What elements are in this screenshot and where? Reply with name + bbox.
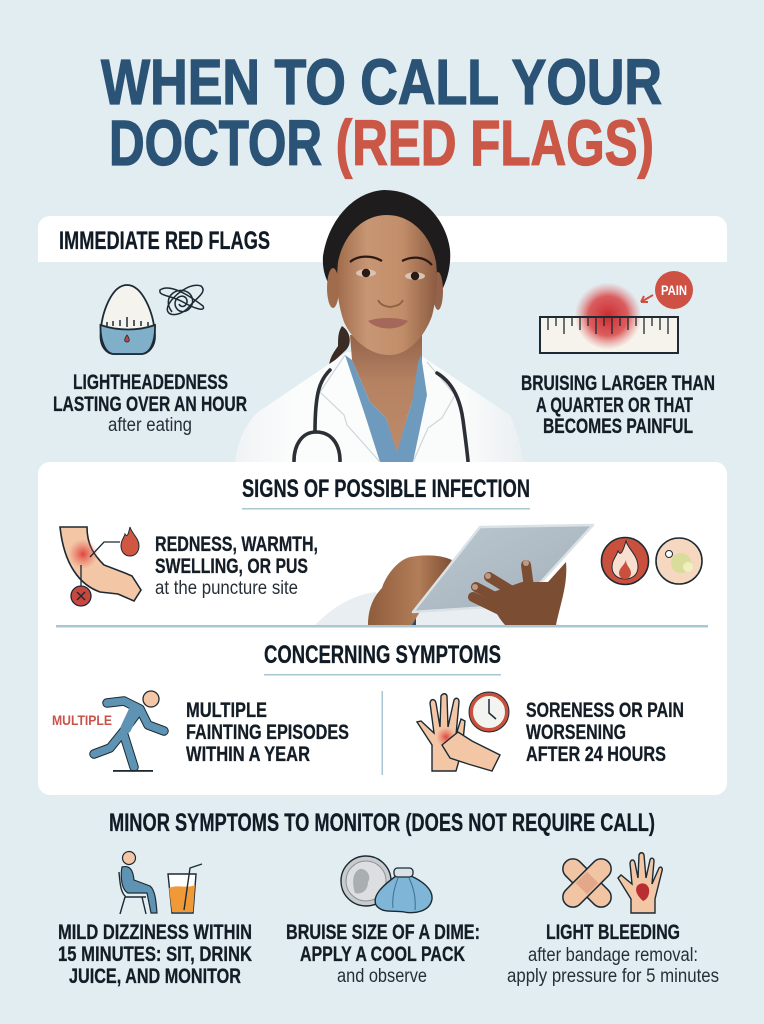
icon: fainting figure: MULTIPLE	[52, 712, 112, 728]
icon: bandage and bleeding hand	[559, 853, 662, 913]
title: DOCTOR (RED FLAGS)	[109, 107, 654, 179]
text: soreness or pain worsening: AFTER 24 HOURS	[526, 743, 666, 766]
text: multiple fainting episodes: MULTIPLE	[186, 699, 267, 722]
text: soreness or pain worsening: SORENESS OR PAIN	[526, 699, 684, 722]
right hand	[493, 562, 566, 625]
text: mild dizziness: MILD DIZZINESS WITHIN	[58, 921, 252, 944]
icon: flame circle	[602, 538, 648, 584]
heading: immediate red flags: IMMEDIATE RED FLAGS	[59, 227, 270, 255]
panel: immediate red flags header	[38, 216, 727, 262]
eyes and brows	[350, 257, 432, 280]
left hand	[368, 555, 452, 625]
text: light bleeding: after bandage removal:	[528, 945, 698, 966]
text: redness warmth swelling	[155, 533, 318, 599]
text: bruising larger than a quarter	[521, 372, 715, 438]
text: multiple fainting episodes: WITHIN A YEAR	[186, 743, 310, 766]
text: multiple fainting episodes: FAINTING EPISODES	[186, 721, 349, 744]
icon: egg timer with dizziness scribble	[100, 285, 203, 354]
text: lightheadedness: LIGHTHEADEDNESS	[73, 371, 228, 394]
text: bruise size of a dime: and observe	[337, 966, 427, 987]
text: bruise size of a dime	[286, 921, 480, 987]
text: redness warmth swelling: SWELLING, OR PUS	[155, 555, 308, 578]
photo: doctor portrait	[235, 190, 523, 462]
text: bruise size of a dime: APPLY A COOL PACK	[300, 943, 465, 966]
text: soreness or pain worsening	[526, 699, 684, 766]
text: bruising larger than a quarter: BECOMES PAINFUL	[543, 415, 693, 438]
text: light bleeding: apply pressure for 5 minutes	[507, 966, 719, 987]
hair	[323, 190, 450, 288]
text: soreness or pain worsening: WORSENING	[526, 721, 626, 744]
icon: seated person and juice glass	[119, 852, 202, 914]
neck	[350, 335, 422, 454]
lapel lines	[320, 355, 455, 462]
ears	[327, 268, 339, 308]
tablet	[413, 525, 593, 612]
mouth	[368, 318, 408, 328]
photo: hands holding tablet	[315, 525, 593, 625]
blue shirt collar	[345, 355, 427, 462]
text: mild dizziness	[58, 921, 252, 988]
text: light bleeding: LIGHT BLEEDING	[546, 921, 680, 944]
text: bruising larger than a quarter: A QUARTER OR THAT	[536, 394, 693, 417]
nose	[378, 300, 403, 307]
text: multiple fainting episodes	[186, 699, 349, 766]
face	[337, 215, 437, 355]
panel: infection and concerning symptoms	[38, 462, 727, 795]
text: lightheadedness	[53, 371, 247, 436]
text: lightheadedness: after eating	[108, 415, 192, 436]
icon: arm with red puncture site	[60, 527, 141, 606]
heading: concerning symptoms: CONCERNING SYMPTOMS	[264, 641, 501, 669]
text: mild dizziness: 15 MINUTES: SIT, DRINK	[58, 943, 252, 966]
ponytail	[329, 326, 350, 368]
text: bruise size of a dime: BRUISE SIZE OF A DIME:	[286, 921, 480, 944]
stethoscope	[294, 370, 468, 461]
lab coat	[235, 352, 523, 462]
text: light bleeding	[507, 921, 719, 987]
icon: ruler with bruise and pain label	[540, 271, 693, 353]
icon: dime and ice pack	[341, 856, 432, 913]
icon: pus circle	[656, 538, 702, 584]
title	[101, 46, 662, 179]
text: redness warmth swelling: REDNESS, WARMTH,	[155, 533, 318, 556]
text: redness warmth swelling: at the puncture site	[155, 578, 298, 599]
text: lightheadedness: LASTING OVER AN HOUR	[53, 393, 247, 416]
icon: ruler with bruise and pain label: PAIN	[661, 283, 687, 298]
icon: fainting figure	[52, 691, 164, 772]
text: mild dizziness: JUICE, AND MONITOR	[69, 965, 241, 988]
heading: signs of possible infection: SIGNS OF POSSIBLE INFECTION	[242, 475, 530, 503]
icon: sore hand and clock	[417, 692, 509, 771]
